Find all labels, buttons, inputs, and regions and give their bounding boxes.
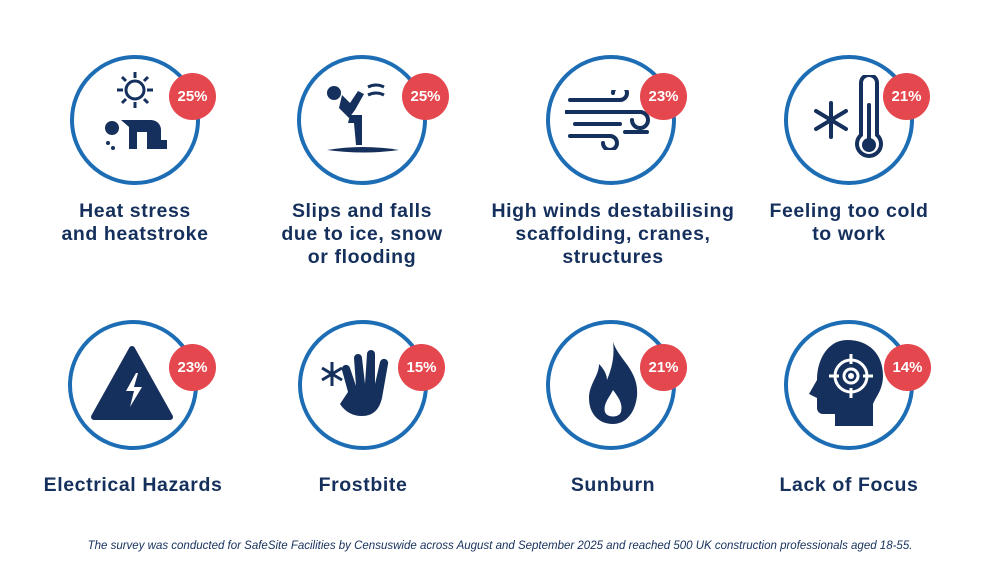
badge (640, 73, 687, 120)
item: slips and falls (281, 55, 449, 268)
label: due to ice, snow (281, 223, 443, 245)
label (281, 200, 443, 268)
badge (640, 344, 687, 391)
icon: snowflake thermometer (814, 75, 883, 158)
item: heat stress (61, 55, 216, 245)
badge: 21% (648, 359, 679, 376)
label: Electrical Hazards (44, 474, 222, 496)
label: and heatstroke (61, 223, 209, 245)
badge: 21% (891, 88, 922, 105)
item: frostbite (298, 320, 445, 496)
label: or flooding (308, 246, 416, 268)
label: to work (812, 223, 886, 245)
label: structures (562, 246, 664, 268)
badge (402, 73, 449, 120)
icon: warning triangle (91, 346, 173, 420)
label: Feeling too cold (769, 200, 929, 222)
badge (169, 344, 216, 391)
label (61, 200, 209, 245)
footer note: The survey was conducted for SafeSite Facilities by Censuswide across August and September 2025 and reached 500 UK construction professionals aged 18-55. (88, 540, 912, 552)
badge (169, 73, 216, 120)
badge (884, 344, 931, 391)
badge: 23% (177, 359, 208, 376)
label (769, 200, 929, 245)
label: Sunburn (571, 474, 655, 496)
icon: flame (589, 342, 638, 424)
icon: head with target (809, 340, 883, 426)
label: Slips and falls (292, 200, 432, 222)
badge: 15% (406, 359, 437, 376)
item: feeling too cold (769, 55, 930, 245)
badge (398, 344, 445, 391)
badge: 14% (892, 359, 923, 376)
icon: wind (565, 90, 650, 150)
label: Heat stress (79, 200, 191, 222)
item: electrical hazards (44, 320, 222, 496)
icon: heat stroke person (105, 72, 167, 150)
item: lack of focus (780, 320, 931, 496)
label: High winds destabilising (491, 200, 734, 222)
label: Frostbite (319, 474, 407, 496)
badge: 23% (648, 88, 679, 105)
item: high winds (491, 55, 734, 268)
badge (883, 73, 930, 120)
label (491, 200, 734, 268)
icon: frozen hand (321, 350, 388, 416)
label: Lack of Focus (780, 474, 918, 496)
label: scaffolding, cranes, (515, 223, 711, 245)
icon: slipping person (327, 84, 399, 152)
badge: 25% (177, 88, 208, 105)
item: sunburn (546, 320, 687, 496)
badge: 25% (410, 88, 441, 105)
